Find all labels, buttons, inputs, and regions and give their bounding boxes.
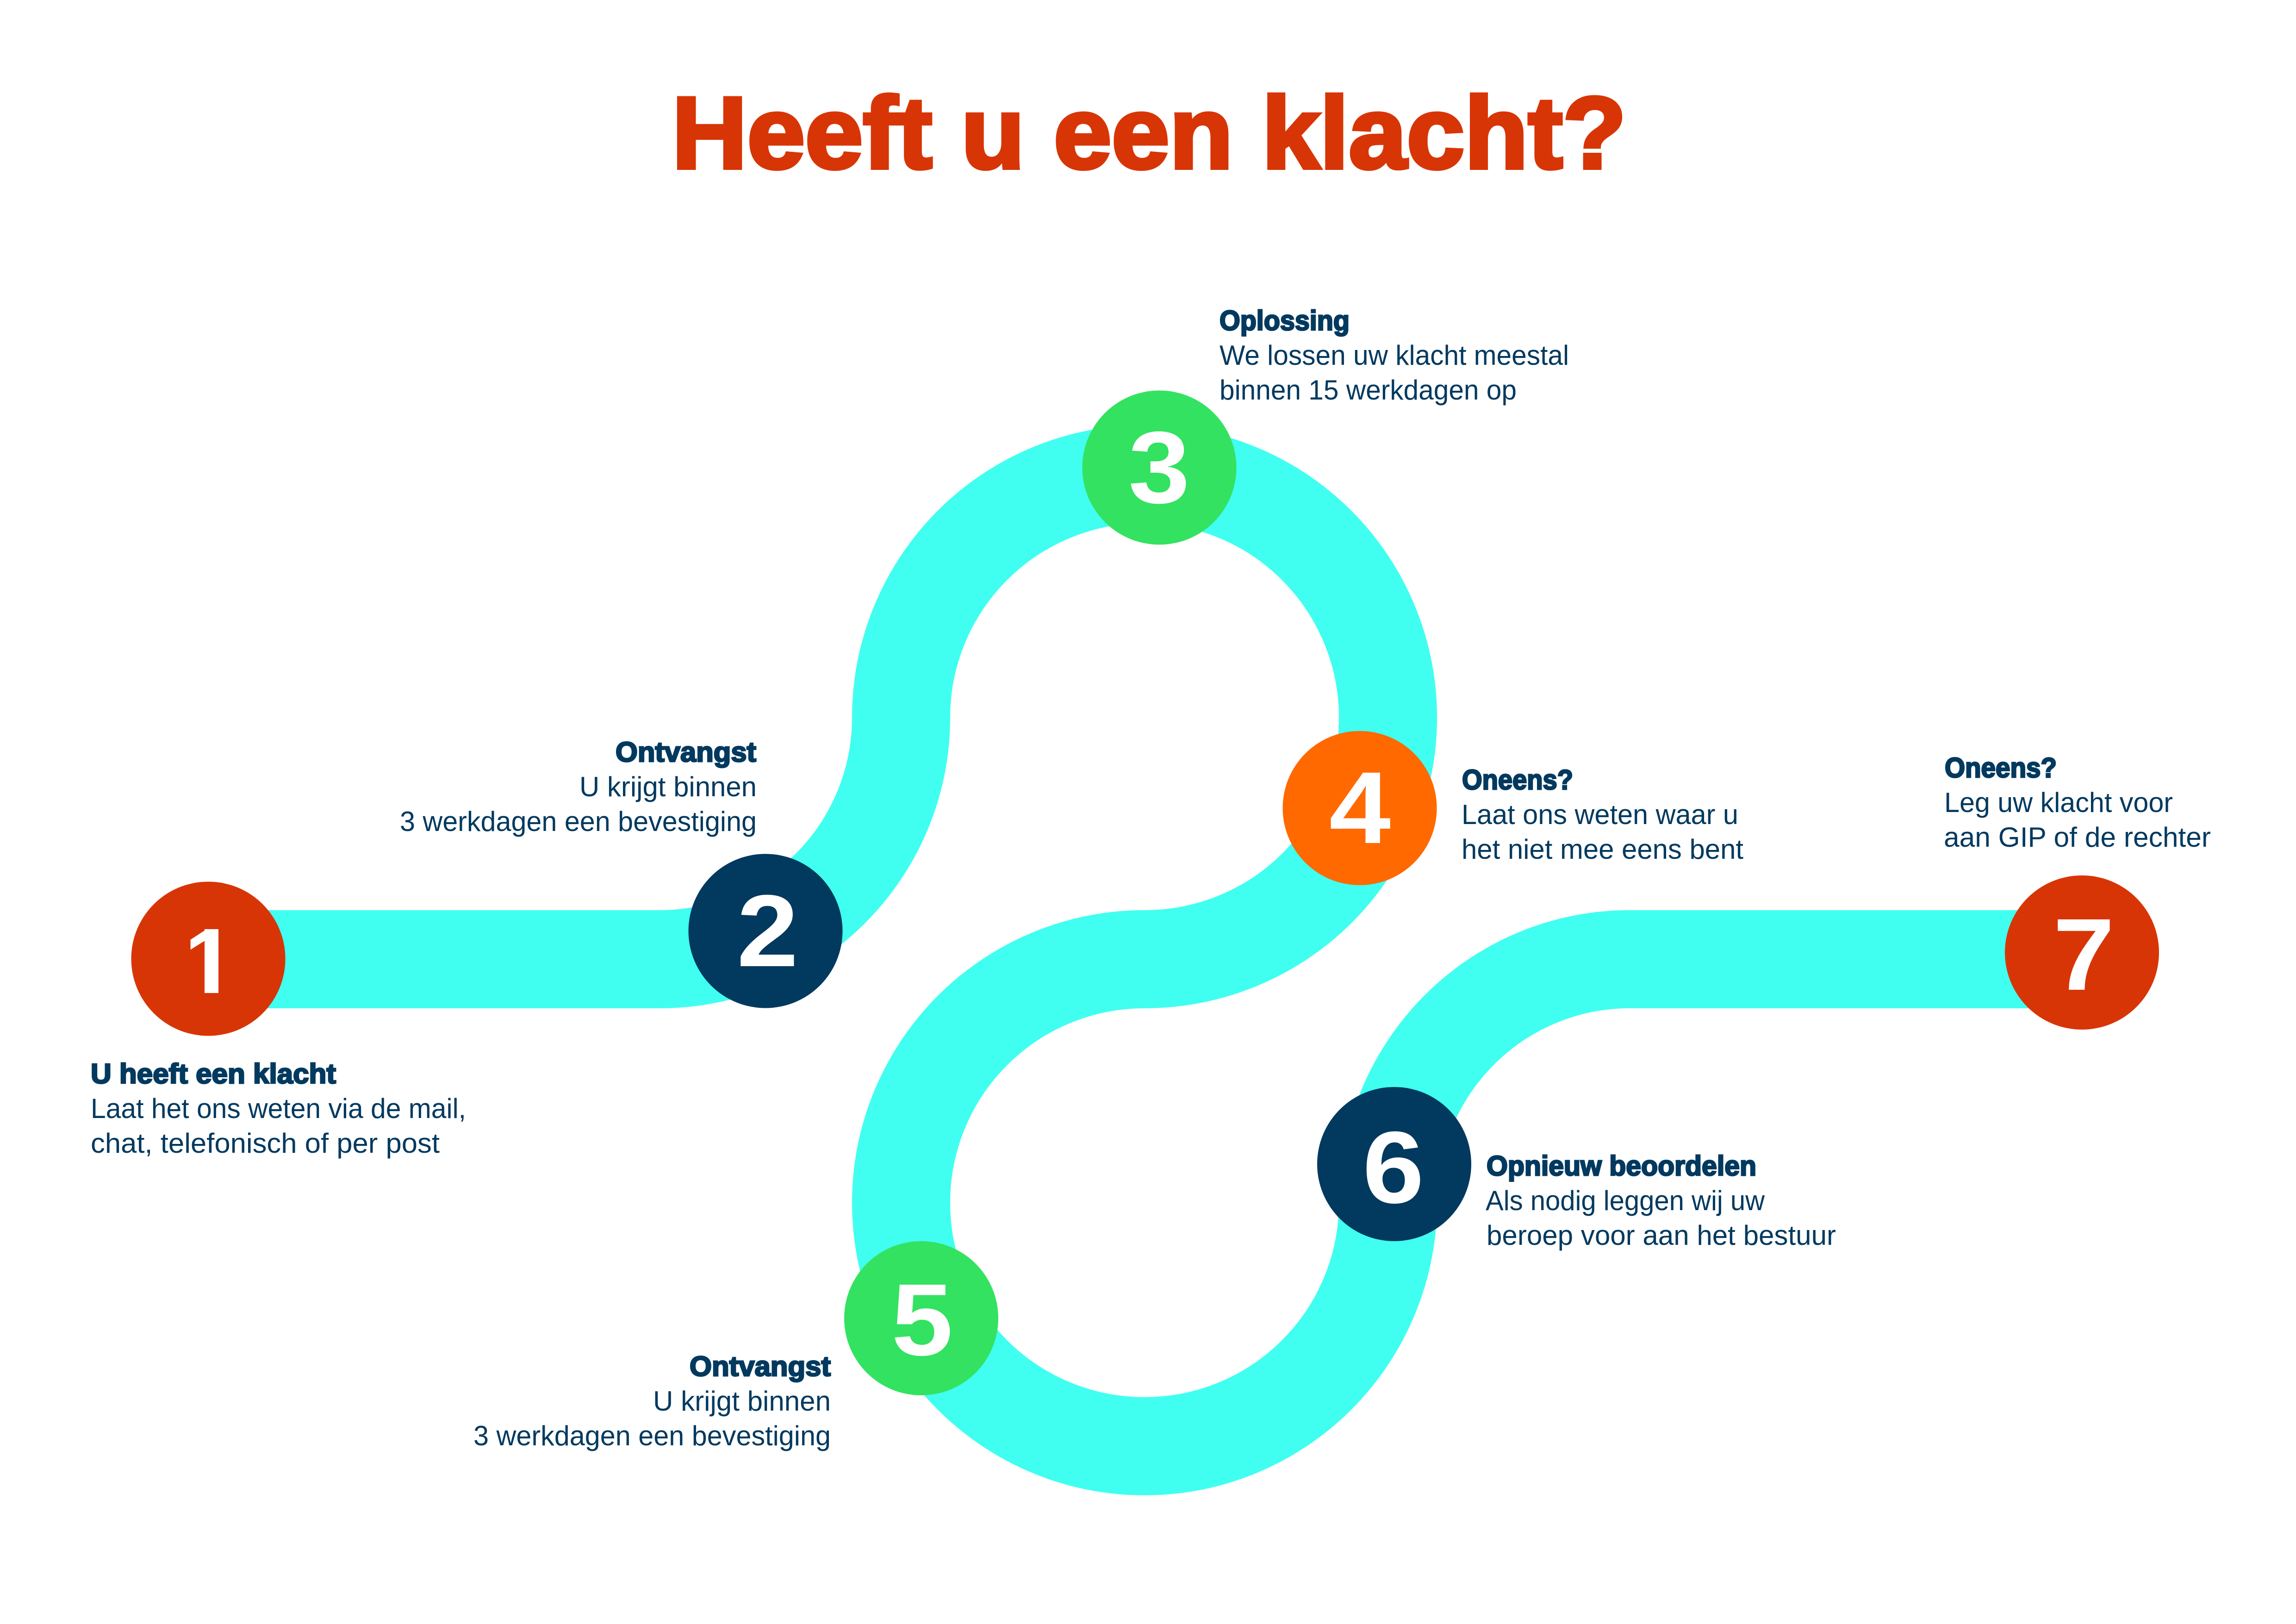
step 4: text: Oneens? — [1462, 764, 1573, 795]
step 1: text: U heeft een klacht — [91, 1058, 336, 1089]
step 5: text: 3 werkdagen een bevestiging — [473, 1420, 831, 1451]
step 7: text: Leg uw klacht voor — [1944, 787, 2173, 818]
step 2: text: Ontvangst — [616, 737, 756, 768]
step 3: marker: 3 — [1128, 410, 1190, 525]
step 1: text — [91, 1058, 466, 1159]
step 4: marker — [1283, 731, 1437, 885]
step 3: text: We lossen uw klacht meestal — [1220, 340, 1569, 371]
step 2: text: U krijgt binnen — [579, 771, 757, 802]
step 1: text: chat, telefonisch of per post — [91, 1128, 440, 1159]
step 7: text: Oneens? — [1945, 752, 2057, 783]
step 3: text — [1220, 305, 1569, 406]
step 6: text: beroep voor aan het bestuur — [1487, 1220, 1836, 1251]
step 6: text: Als nodig leggen wij uw — [1486, 1185, 1765, 1216]
step 6: text: Opnieuw beoordelen — [1487, 1150, 1756, 1181]
step 5: marker: 5 — [891, 1262, 953, 1377]
step 7: marker — [2005, 875, 2159, 1030]
step 3: text: Oplossing — [1220, 305, 1350, 336]
title: Heeft u een klacht? — [672, 76, 1626, 190]
step 6: marker — [1317, 1087, 1471, 1241]
step 4: text: het niet mee eens bent — [1462, 834, 1743, 865]
step 6: marker: 6 — [1363, 1110, 1424, 1224]
step 3: marker — [1082, 391, 1237, 544]
step 6: text — [1486, 1150, 1836, 1251]
step 1: text: Laat het ons weten via de mail, — [91, 1093, 466, 1124]
step 2: text: 3 werkdagen een bevestiging — [400, 806, 757, 837]
infographic: complaint process route — [92, 93, 2210, 1495]
step 5: text: U krijgt binnen — [653, 1386, 831, 1417]
step 5: text: Ontvangst — [690, 1351, 831, 1382]
step 5: marker — [844, 1241, 998, 1395]
step 1: marker — [131, 881, 285, 1036]
step 2: marker — [689, 854, 842, 1008]
step 5: text — [473, 1351, 831, 1451]
winding route path — [208, 474, 2082, 1446]
step 4: marker: 4 — [1329, 750, 1391, 865]
step 2: text — [400, 737, 757, 837]
step 7: text: aan GIP of de rechter — [1944, 822, 2211, 853]
step 3: text: binnen 15 werkdagen op — [1220, 375, 1517, 406]
step 4: text: Laat ons weten waar u — [1462, 799, 1738, 830]
step 7: marker: 7 — [2053, 897, 2115, 1012]
step 2: marker: 2 — [737, 874, 798, 988]
step 4: text — [1462, 764, 1743, 865]
step 7: text — [1944, 752, 2211, 853]
step 1: marker: 1 — [184, 910, 236, 1013]
